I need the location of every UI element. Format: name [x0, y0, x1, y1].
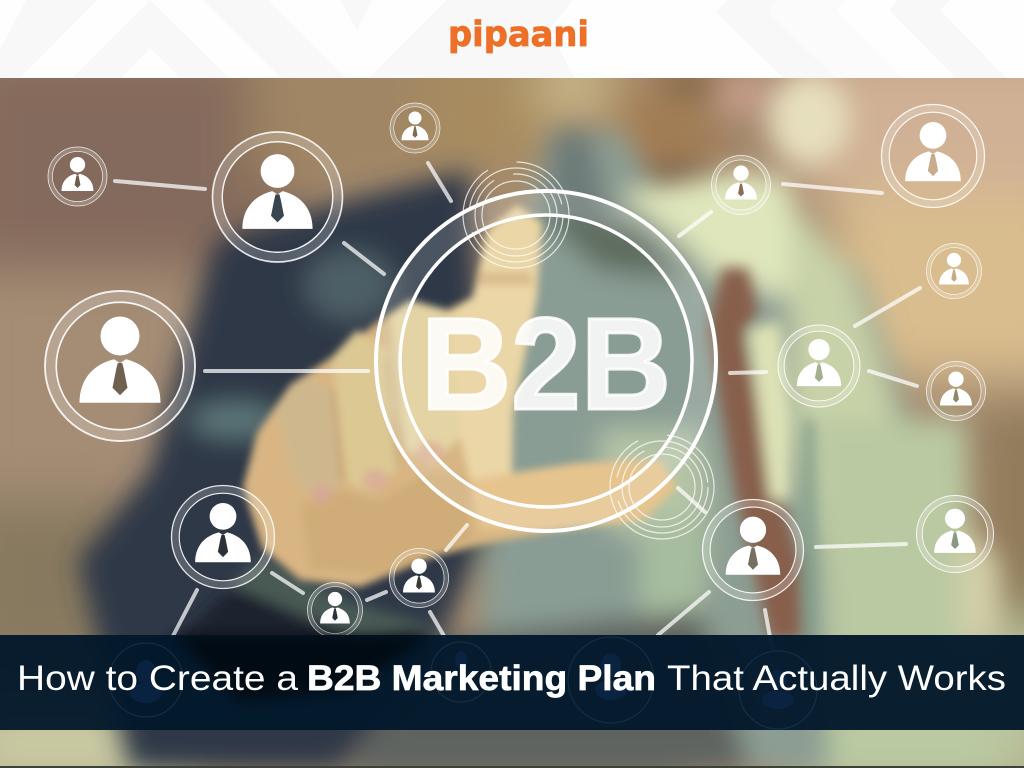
B2B label: B2B: [421, 290, 671, 437]
person icon: right centre: [778, 325, 860, 407]
person icon: top-left large: [212, 132, 342, 262]
faint icons behind banner: [109, 637, 817, 729]
suit and shirt: [78, 130, 1000, 768]
person icon: lower right large: [702, 500, 804, 600]
person icon: top-left small: [48, 147, 107, 206]
title banner: [0, 635, 1024, 730]
person icon: lower right far: [916, 496, 994, 572]
face highlights: [644, 78, 860, 194]
dark sleeve shadow: [175, 635, 430, 700]
central B2B circle: [376, 191, 716, 531]
person icon: bottom centre: [390, 548, 448, 608]
person icon: top centre: [390, 103, 440, 153]
ripple: thumb tip: [610, 435, 714, 539]
person icon: lower left: [172, 486, 274, 588]
person icon: bottom small: [308, 582, 362, 638]
hand: [243, 205, 677, 587]
title text: [17, 659, 1006, 698]
ring finger: [332, 330, 398, 493]
title text: How to Create a: [17, 659, 299, 698]
pinky finger: [279, 381, 336, 488]
header band: [0, 0, 1024, 78]
network connector lines: [115, 163, 920, 648]
nails: [314, 486, 333, 506]
person icon: right small upper: [926, 244, 982, 298]
finger creases: [386, 321, 404, 456]
person icon: left large: [45, 291, 195, 441]
middle finger: [387, 300, 460, 465]
index finger: [447, 205, 542, 480]
person icon: upper right small: [712, 156, 770, 214]
person icon: upper right large: [882, 104, 984, 208]
ripple: index finger tip: [463, 162, 569, 268]
title text: That Actually Works: [667, 659, 1006, 698]
bottom edge line: [0, 766, 1024, 768]
logo: pipaani: pipaani: [448, 15, 589, 55]
title text: B2B Marketing Plan: [307, 659, 656, 698]
person icon: right small lower: [926, 362, 986, 420]
